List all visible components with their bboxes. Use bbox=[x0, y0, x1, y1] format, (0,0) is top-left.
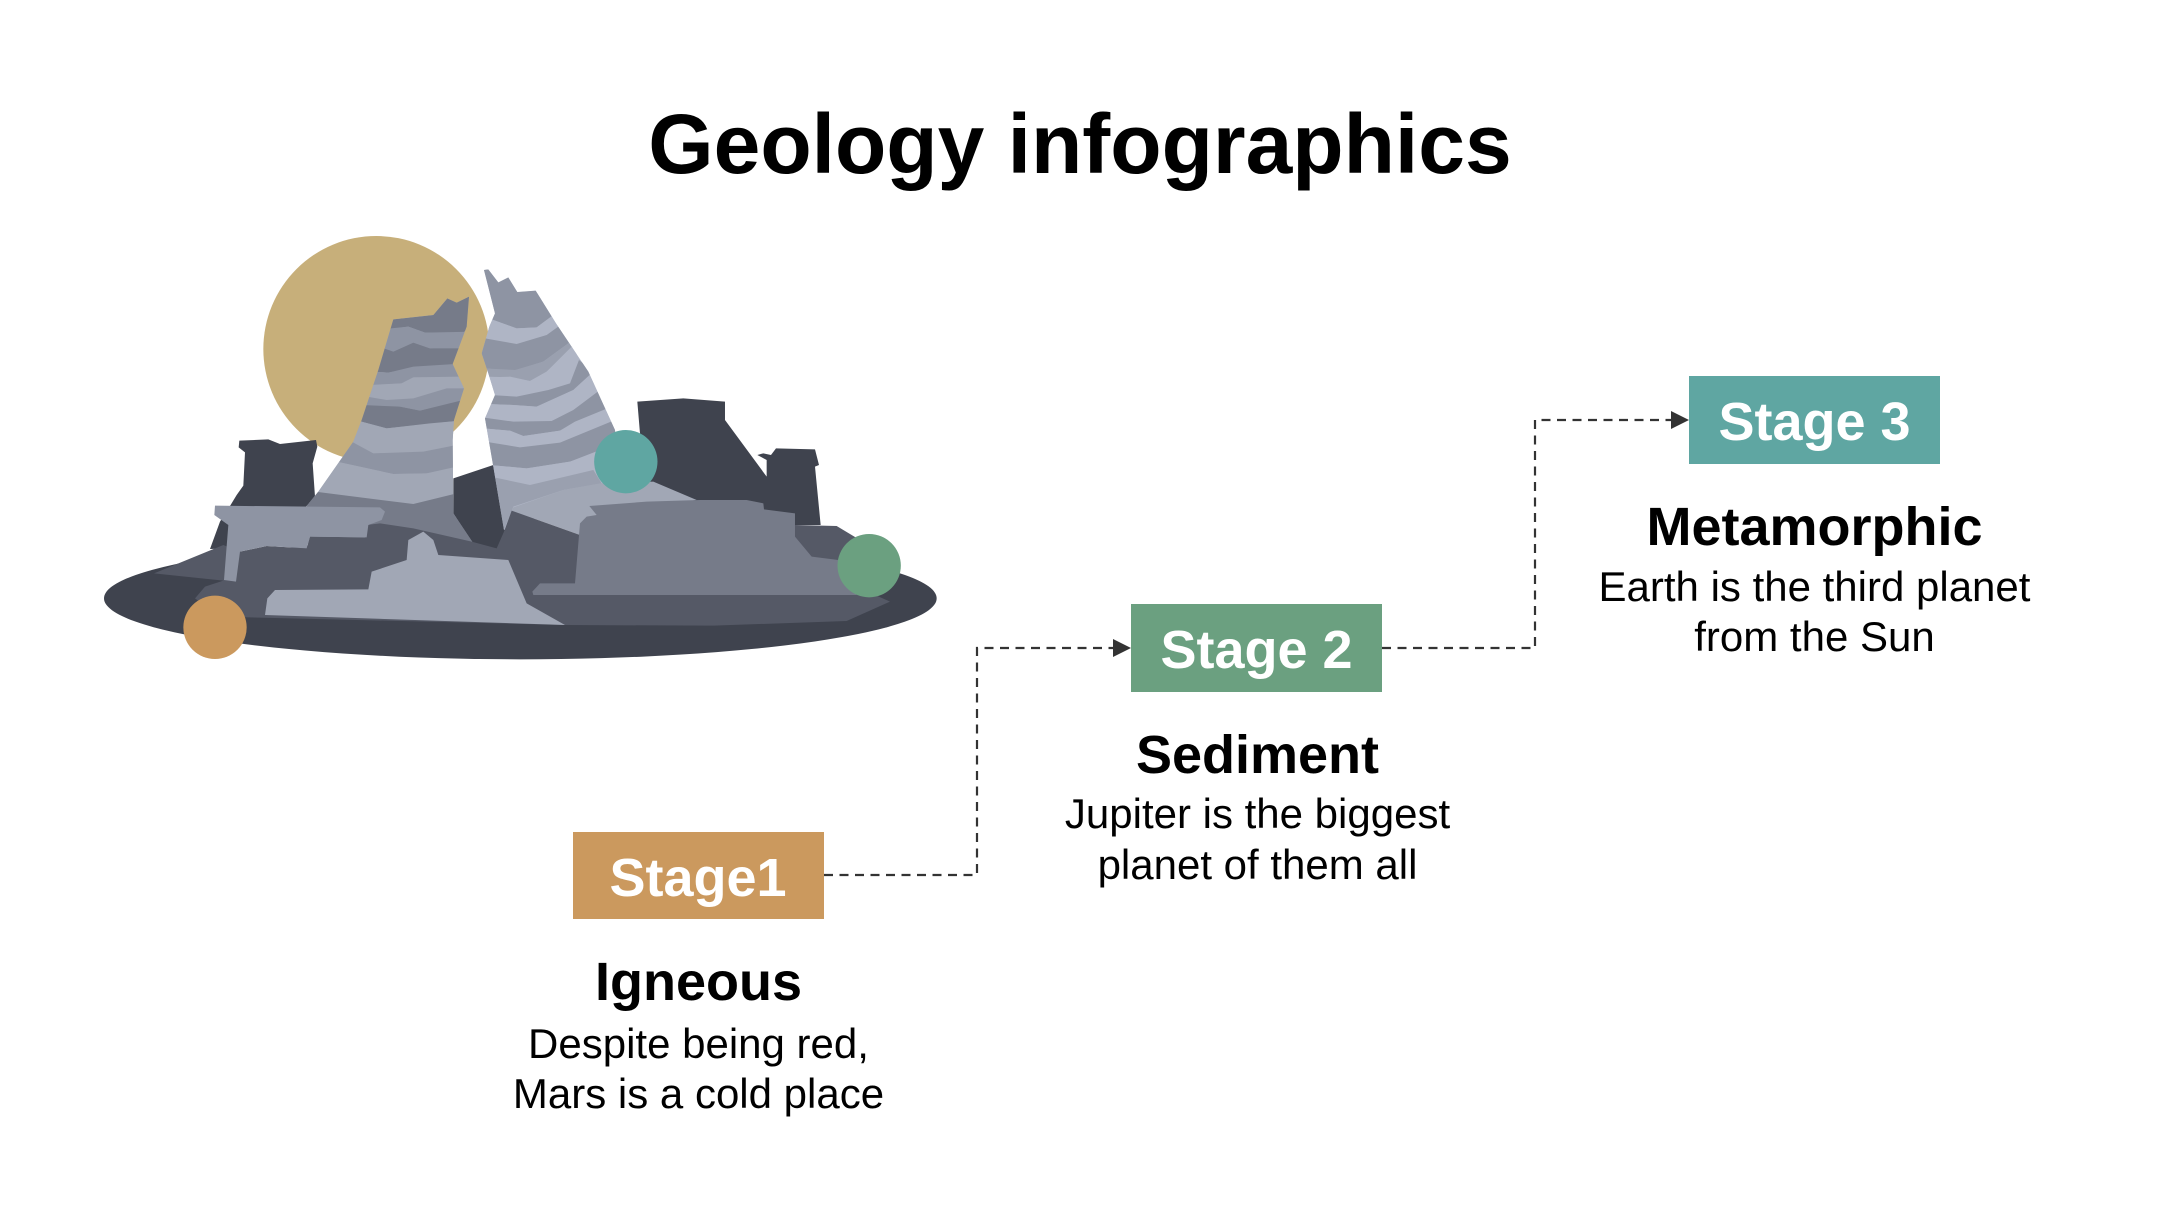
stage 3 heading: Metamorphic bbox=[1646, 497, 1983, 557]
title: Geology infographics bbox=[648, 97, 1512, 191]
arrow: stage 2 to stage 3 bbox=[1382, 411, 1689, 648]
stage 2 block bbox=[1065, 604, 1450, 888]
front-left shelf bbox=[214, 506, 385, 582]
left spire bbox=[306, 296, 472, 544]
arrow: stage 1 to stage 2 bbox=[824, 639, 1131, 875]
stage 3 description: from the Sun bbox=[1694, 613, 1935, 660]
back rock left bbox=[210, 439, 317, 549]
orange dot bbox=[183, 596, 247, 659]
illustration: rock landscape bbox=[104, 236, 937, 659]
stage 3 badge bbox=[1689, 376, 1940, 464]
stage 1 description: Despite being red, bbox=[528, 1020, 869, 1067]
stage 1 heading: Igneous bbox=[595, 952, 802, 1012]
front wedge behind block bbox=[512, 482, 697, 535]
stage 3 badge: Stage 3 bbox=[1718, 392, 1911, 452]
right spire bbox=[482, 270, 616, 530]
front-right block bbox=[532, 500, 857, 595]
stage 2 description: planet of them all bbox=[1098, 841, 1417, 888]
stage 2 badge: Stage 2 bbox=[1160, 620, 1353, 680]
stage 3 block bbox=[1599, 376, 2031, 660]
stage 1 description: Mars is a cold place bbox=[513, 1070, 884, 1117]
stage 2 description: Jupiter is the biggest bbox=[1065, 790, 1450, 837]
stage 1 block bbox=[513, 832, 884, 1117]
back rock centre bbox=[453, 465, 507, 548]
sun disc bbox=[263, 236, 489, 462]
stage 1 badge bbox=[573, 832, 824, 919]
back rock right bbox=[637, 398, 821, 553]
teal dot bbox=[594, 430, 657, 493]
green dot bbox=[837, 534, 901, 597]
base ellipse bbox=[104, 537, 937, 659]
stage 2 heading: Sediment bbox=[1136, 725, 1379, 785]
front-left light rock bbox=[265, 532, 565, 625]
stage 2 badge bbox=[1131, 604, 1382, 692]
stage 1 badge: Stage1 bbox=[609, 848, 787, 908]
stage 3 description: Earth is the third planet bbox=[1599, 563, 2030, 610]
mid-dark ground bbox=[154, 511, 890, 626]
